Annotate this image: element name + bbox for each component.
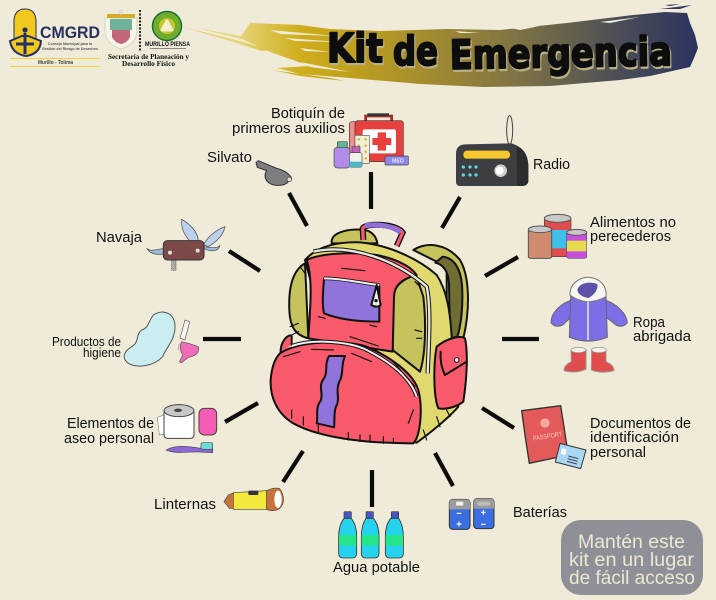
label: food: Alimentos no xyxy=(590,215,676,231)
icon: hygiene products xyxy=(124,312,199,366)
label: knife: Navaja xyxy=(96,230,143,246)
boots xyxy=(564,348,586,372)
logo: CMGRD: Consejo Municipal para la xyxy=(48,42,93,46)
icon: warm clothes xyxy=(551,277,627,372)
left panel xyxy=(289,263,308,338)
backpack xyxy=(271,225,468,443)
title text xyxy=(327,26,672,79)
top zipper xyxy=(313,250,429,373)
line to documents xyxy=(482,408,514,428)
icon: pocket knife xyxy=(147,219,225,270)
handle xyxy=(363,225,403,246)
line to radio xyxy=(442,197,460,228)
icon: whistle xyxy=(256,161,292,185)
label: whistle: Silvato xyxy=(207,150,252,166)
title shadow: de xyxy=(394,31,439,77)
logo: CMGRD xyxy=(10,9,100,67)
line to toiletries xyxy=(225,403,258,422)
purple strap xyxy=(317,356,345,427)
label: first aid kit: primeros auxilios xyxy=(232,121,345,137)
side pocket xyxy=(434,337,467,409)
title shadow xyxy=(328,28,673,81)
line to flashlight xyxy=(283,451,303,482)
label: documents xyxy=(590,416,691,461)
hood xyxy=(570,277,606,302)
label: batteries: Baterías xyxy=(513,505,567,521)
logo: CMGRD: CMGRD xyxy=(40,23,100,42)
title text: Kit xyxy=(327,26,383,72)
logo: municipal crest xyxy=(105,10,137,49)
secretaria text: Desarrollo Físico xyxy=(122,59,175,68)
sleeves xyxy=(551,300,573,326)
icon: radio xyxy=(456,116,528,186)
icon: flashlight xyxy=(224,488,283,511)
jacket body xyxy=(569,297,607,341)
header logos xyxy=(10,9,191,68)
dotted divider xyxy=(139,10,141,51)
line to clothes xyxy=(502,337,539,341)
line to whistle xyxy=(289,193,307,226)
label: flashlight: Linternas xyxy=(154,497,216,513)
line to water xyxy=(370,470,374,507)
left side loop xyxy=(281,335,292,353)
label: toiletries: Elementos de xyxy=(67,416,154,432)
label: documents: Documentos de xyxy=(590,416,691,432)
back strap xyxy=(413,245,468,343)
zipper pull xyxy=(371,285,381,307)
label: radio: Radio xyxy=(533,157,570,173)
label: toiletries: aseo personal xyxy=(64,431,154,447)
secretaria text xyxy=(108,52,189,68)
logo: Murillo Piensa: MURILLO PIENSA xyxy=(145,42,191,48)
line to hygiene xyxy=(203,337,241,341)
callout: keep this kit accessible xyxy=(561,520,703,595)
icon: passport and id card xyxy=(522,406,586,469)
hem stitches xyxy=(283,267,450,443)
icon: first aid kit xyxy=(334,113,408,168)
logo: CMGRD: Murillo - Tolima xyxy=(38,60,73,66)
front pocket xyxy=(271,342,421,443)
logo: Murillo Piensa xyxy=(145,12,191,49)
label: first aid kit: Botiquín de xyxy=(271,106,345,122)
callout: keep this kit accessible: Mantén este xyxy=(578,531,685,553)
label: food xyxy=(590,215,676,245)
line to food xyxy=(485,257,518,276)
title text: Emergencia xyxy=(449,29,672,79)
title xyxy=(327,26,673,81)
icon: toiletries xyxy=(157,405,217,453)
callout: keep this kit accessible: de fácil acceso xyxy=(569,567,695,589)
label: food: perecederos xyxy=(590,229,671,245)
label: clothes xyxy=(633,315,692,345)
title shadow: Kit xyxy=(328,28,384,74)
label: hygiene: higiene xyxy=(83,346,121,360)
icon: first aid kit: MED xyxy=(392,158,404,164)
icon: passport and id card: PASSPORT xyxy=(533,431,563,443)
title shadow: Emergencia xyxy=(450,31,673,81)
right panel xyxy=(393,275,425,372)
secretaria text: Secretaría de Planeación y xyxy=(108,52,189,61)
label: documents: identificación xyxy=(590,430,679,446)
callout: keep this kit accessible: kit en un lugar xyxy=(569,549,695,571)
logo: CMGRD: Gestión del Riesgo de Desastres xyxy=(42,47,98,51)
label: clothes: Ropa xyxy=(633,315,666,331)
center panel xyxy=(307,253,417,352)
title brush stroke xyxy=(183,4,698,87)
top strap xyxy=(332,230,377,243)
purple pocket xyxy=(323,278,379,322)
label: hygiene: Productos de xyxy=(52,335,121,349)
label: documents: personal xyxy=(590,445,646,461)
body xyxy=(305,242,458,443)
label: hygiene xyxy=(52,335,121,360)
line to knife xyxy=(229,251,260,271)
label: clothes: abrigada xyxy=(633,329,692,345)
title text: de xyxy=(393,29,438,75)
label: first aid kit xyxy=(232,106,345,137)
connector lines xyxy=(203,172,539,507)
label: water: Agua potable xyxy=(333,560,420,576)
label: toiletries xyxy=(64,416,154,447)
icon: canned food xyxy=(528,214,587,258)
icon: batteries xyxy=(449,499,494,529)
line to first aid kit xyxy=(369,172,373,209)
icon: water bottles xyxy=(339,512,403,558)
line to batteries xyxy=(435,453,453,486)
